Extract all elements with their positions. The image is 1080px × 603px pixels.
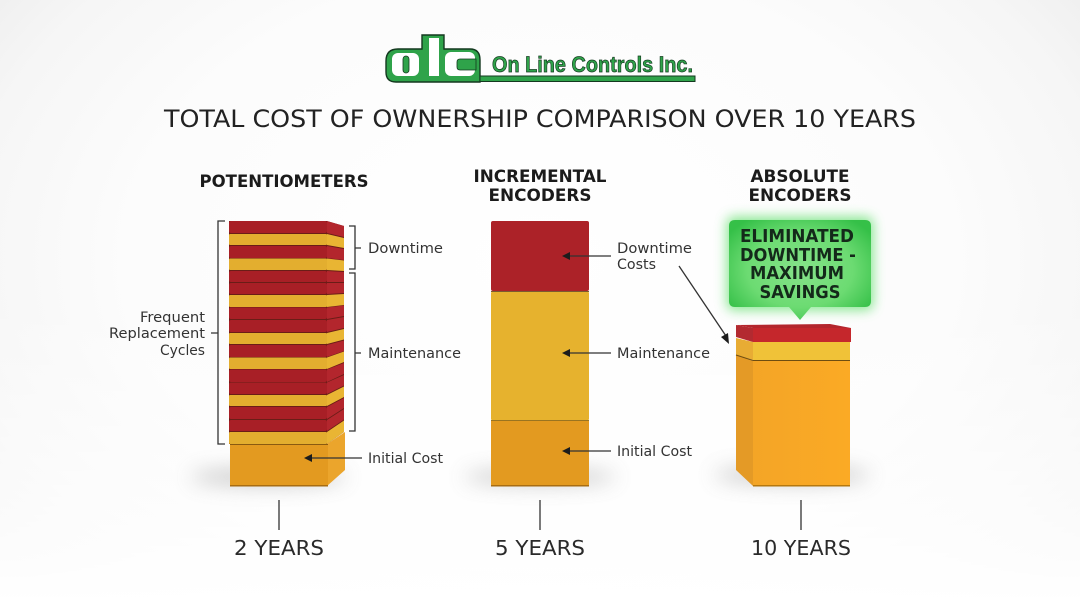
stack: absolute encoders (736, 324, 851, 486)
bracket: frequent replacement cycles (211, 221, 225, 444)
title: TOTAL COST OF OWNERSHIP COMPARISON OVER 10 YEARS (163, 105, 916, 133)
label: frequent replacement cycles: Frequent (140, 310, 206, 326)
label: downtime: Downtime (368, 241, 443, 257)
arrow and label: downtime costs: Costs (617, 257, 656, 273)
label: frequent replacement cycles: Replacement (109, 326, 206, 342)
label: maintenance: Maintenance (368, 346, 461, 362)
callout: eliminated downtime: SAVINGS (760, 283, 840, 303)
callout: eliminated downtime: DOWNTIME - (740, 246, 856, 266)
arrow: downtime to absolute stack (679, 266, 729, 344)
callout: eliminated downtime: ELIMINATED (740, 227, 854, 247)
label: frequent replacement cycles: Cycles (160, 343, 205, 359)
arrow and label: downtime costs (562, 241, 692, 273)
callout: eliminated downtime (727, 217, 873, 320)
arrow and label: initial cost (304, 451, 444, 467)
timeline: 5 years: 5 YEARS (495, 536, 585, 560)
arrow and label: downtime costs: Downtime (617, 241, 692, 257)
bracket: downtime (349, 226, 361, 269)
arrow and label: maintenance (562, 346, 710, 362)
timeline: 2 years (234, 500, 324, 560)
column heading: potentiometers: POTENTIOMETERS (200, 172, 368, 191)
stack: incremental encoders (491, 221, 589, 486)
floor shadows (190, 466, 870, 486)
column heading: incremental encoders: INCREMENTAL (474, 167, 607, 186)
logo (386, 35, 695, 82)
timeline: 5 years (495, 500, 585, 560)
callout: eliminated downtime: MAXIMUM (750, 264, 844, 284)
column heading: absolute encoders: ENCODERS (748, 186, 852, 205)
arrow and label: maintenance: Maintenance (617, 346, 710, 362)
column heading: incremental encoders: ENCODERS (488, 186, 592, 205)
arrow and label: initial cost (562, 444, 693, 460)
stack: potentiometers (229, 221, 345, 486)
arrow and label: initial cost: Initial Cost (617, 444, 693, 460)
timeline: 10 years (751, 500, 851, 560)
timeline: 10 years: 10 YEARS (751, 536, 851, 560)
bracket: maintenance (349, 273, 361, 431)
arrow and label: initial cost: Initial Cost (368, 451, 444, 467)
logo: On Line Controls Inc. (492, 52, 693, 77)
timeline: 2 years: 2 YEARS (234, 536, 324, 560)
column heading: absolute encoders: ABSOLUTE (750, 167, 850, 186)
